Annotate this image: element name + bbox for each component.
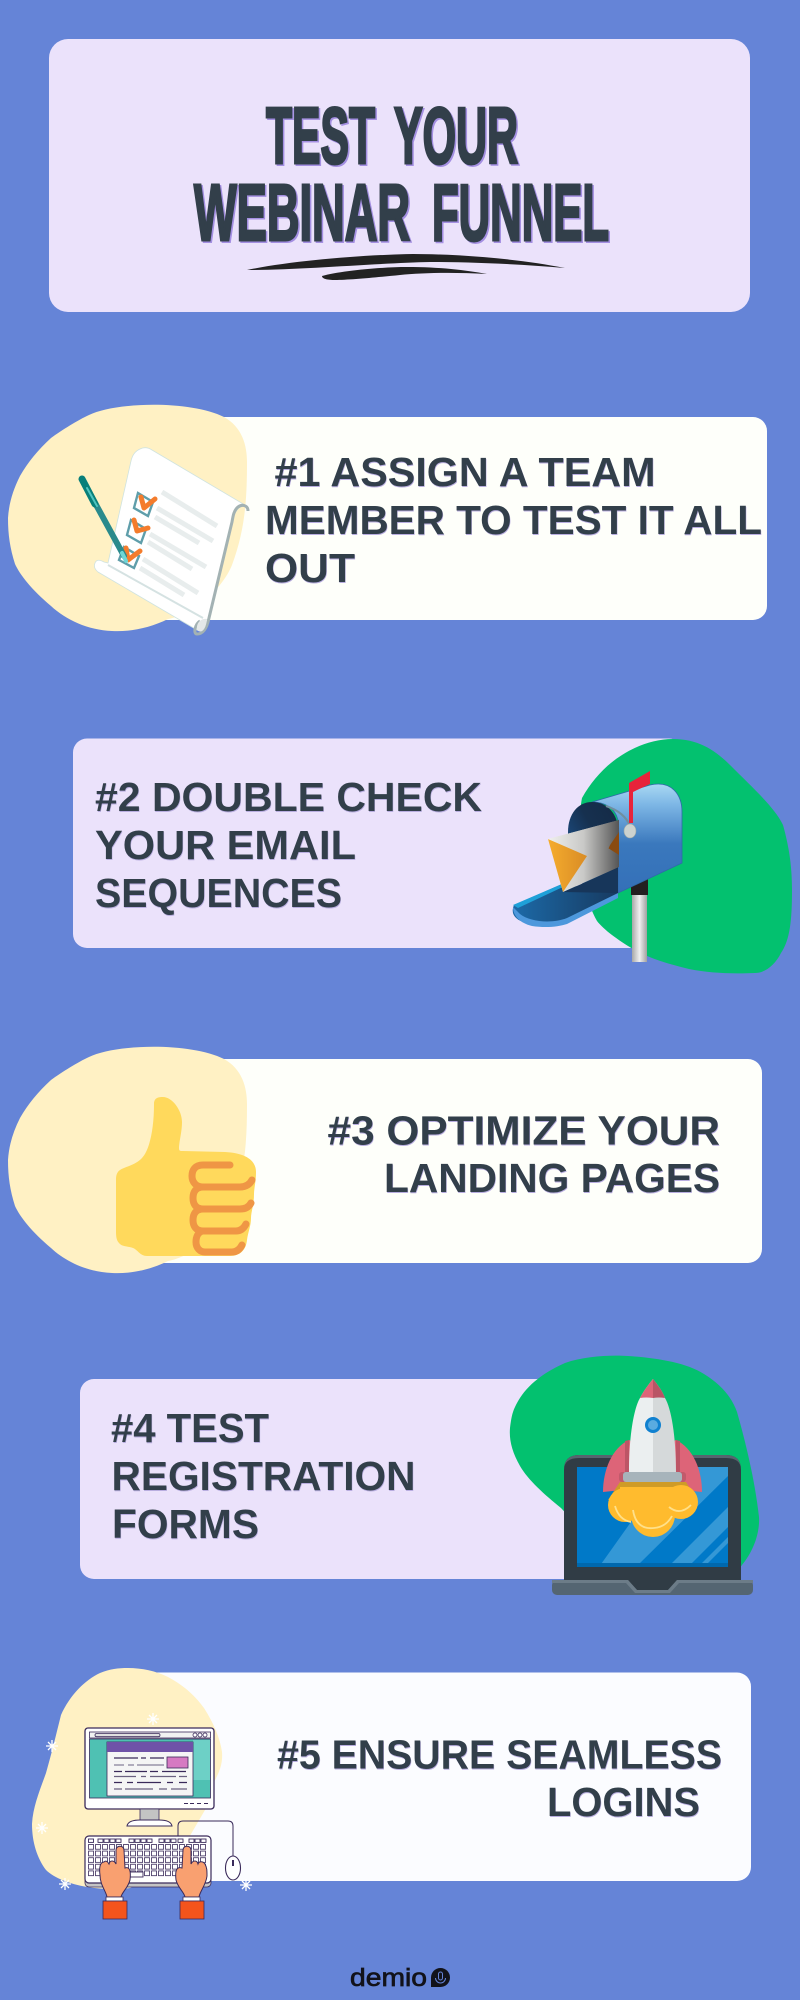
step 2 text [95, 774, 483, 917]
icon: mailbox [513, 771, 682, 962]
step 1 text: MEMBER TO TEST IT ALL [266, 498, 762, 544]
right hand [176, 1846, 207, 1919]
step 1 card [120, 417, 767, 620]
title: TEST [266, 91, 375, 180]
step 2 text: #2 DOUBLE CHECK [95, 774, 482, 820]
monitor [85, 1728, 214, 1809]
step 3 text: #3 OPTIMIZE YOUR [328, 1108, 720, 1154]
pen [82, 479, 126, 561]
step 3 text: LANDING PAGES [384, 1156, 720, 1202]
logo: demio [350, 1964, 450, 1992]
panel: step 3 [8, 1047, 762, 1273]
step 4 blob [510, 1356, 759, 1575]
keyboard [85, 1840, 211, 1887]
step 2 text: SEQUENCES [96, 871, 342, 917]
title: FUNNEL [434, 170, 610, 258]
step 4 text: REGISTRATION [112, 1453, 416, 1499]
panel: step 5 [32, 1668, 751, 1919]
icon: checklist scroll [82, 448, 248, 634]
step 1 blob [8, 405, 247, 631]
step 5 text: #5 ENSURE SEAMLESS [278, 1732, 722, 1778]
step 4 text: #4 TEST [111, 1405, 269, 1451]
step 5 text [277, 1732, 722, 1826]
step 3 text: LANDING PAGES [384, 1155, 720, 1201]
step 4 card [80, 1379, 640, 1579]
step 4 text [111, 1405, 416, 1548]
panel: step 4 [80, 1356, 759, 1595]
title: FUNNEL [432, 168, 609, 257]
panel: step 1 [8, 405, 767, 634]
step 4 text: FORMS [112, 1501, 259, 1547]
logo: demio: demio [350, 1964, 427, 1992]
step 3 text: #3 OPTIMIZE YOUR [328, 1108, 720, 1154]
step 5 text: LOGINS [548, 1780, 700, 1826]
step 3 text [328, 1108, 720, 1202]
fingers [192, 1165, 252, 1252]
step 4 text: FORMS [112, 1502, 260, 1548]
title: YOUR [396, 92, 520, 182]
title card [49, 39, 750, 312]
title: WEBINAR [196, 170, 412, 258]
flame [608, 1482, 698, 1537]
monitor stand [140, 1809, 159, 1820]
step 2 card [73, 738, 683, 948]
step 1 text: #1 ASSIGN A TEAM [274, 449, 656, 495]
rocket [603, 1379, 702, 1537]
step 2 blob [580, 739, 792, 973]
panel: step 2 [73, 738, 792, 973]
step 5 blob [32, 1668, 222, 1889]
icon: laptop with rocket [552, 1379, 753, 1595]
title: TEST [268, 92, 377, 182]
icon: demio mic [431, 1968, 450, 1987]
title: WEBINAR [194, 168, 410, 257]
step 1 text: MEMBER TO TEST IT ALL [265, 497, 762, 543]
title: YOUR [394, 91, 518, 180]
step 5 card [100, 1672, 751, 1881]
icon: thumbs up [116, 1097, 256, 1256]
title panel [49, 39, 750, 312]
step 2 text: #2 DOUBLE CHECK [96, 775, 483, 821]
step 4 text: REGISTRATION [112, 1454, 416, 1500]
step 5 text: #5 ENSURE SEAMLESS [277, 1732, 722, 1778]
step 3 card [120, 1059, 762, 1263]
step 5 text: LOGINS [547, 1779, 700, 1825]
step 1 text: #1 ASSIGN A TEAM [275, 450, 656, 496]
step 1 text: OUT [266, 546, 356, 592]
step 2 text: YOUR EMAIL [95, 822, 356, 868]
step 2 text: YOUR EMAIL [96, 823, 356, 869]
title [194, 91, 610, 258]
step 2 text: SEQUENCES [95, 870, 342, 916]
step 1 text: OUT [265, 545, 355, 591]
step 4 text: #4 TEST [112, 1406, 270, 1452]
left hand [100, 1846, 130, 1919]
step 1 text [265, 449, 762, 592]
sparkles [36, 1713, 252, 1891]
brush underline [247, 254, 565, 280]
icon: computer and typing hands [36, 1713, 252, 1919]
mouse cable and mouse [178, 1821, 233, 1857]
step 3 blob [8, 1047, 247, 1273]
